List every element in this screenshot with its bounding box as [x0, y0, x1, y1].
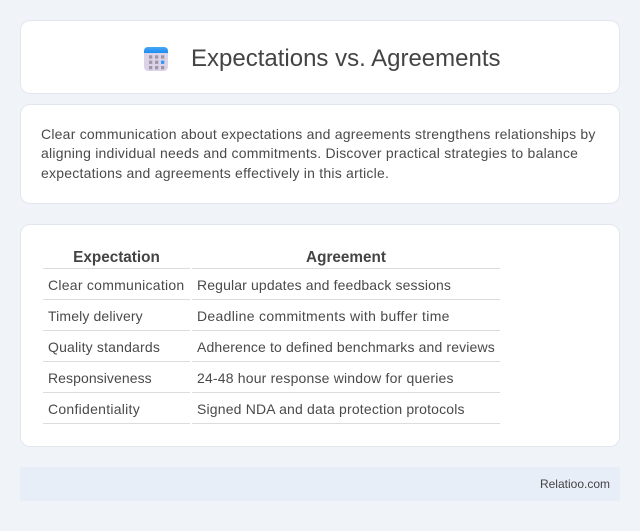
row 1: [48, 277, 451, 293]
row 4: 24-48 hour response window for queries: [197, 370, 454, 386]
row 3: Quality standards: [48, 339, 160, 355]
footer text: Relatioo.com: [540, 477, 610, 491]
footer bar: [20, 467, 620, 501]
row 5: Signed NDA and data protection protocols: [197, 401, 465, 417]
row 5: Confidentiality: [48, 401, 140, 417]
table heading: Agreement: Agreement: [306, 249, 386, 266]
row 2: Deadline commitments with buffer time: [197, 308, 450, 324]
intro text: expectations and agreements effectively in this article.: [41, 165, 389, 181]
row 1: Clear communication: [48, 277, 184, 293]
row 4: [48, 370, 454, 386]
row 4: Responsiveness: [48, 370, 152, 386]
icon: calendar: [144, 47, 168, 71]
panel: title card: [20, 20, 620, 94]
row 3: [48, 339, 495, 355]
row 2: [48, 308, 450, 324]
row 2: Timely delivery: [48, 308, 143, 324]
title: Expectations vs. Agreements: [191, 45, 500, 72]
panel: introduction: [20, 104, 620, 204]
table heading: Expectation: Expectation: [73, 249, 160, 266]
intro text: Clear communication about expectations and agreements strengthens relationships by: [41, 126, 596, 142]
panel: comparison table: [20, 224, 620, 447]
intro text: [41, 126, 596, 181]
intro text: aligning individual needs and commitments. Discover practical strategies to balance: [41, 145, 578, 161]
row 5: [48, 401, 465, 417]
row 1: Regular updates and feedback sessions: [197, 277, 451, 293]
row 3: Adherence to defined benchmarks and reviews: [197, 339, 495, 355]
